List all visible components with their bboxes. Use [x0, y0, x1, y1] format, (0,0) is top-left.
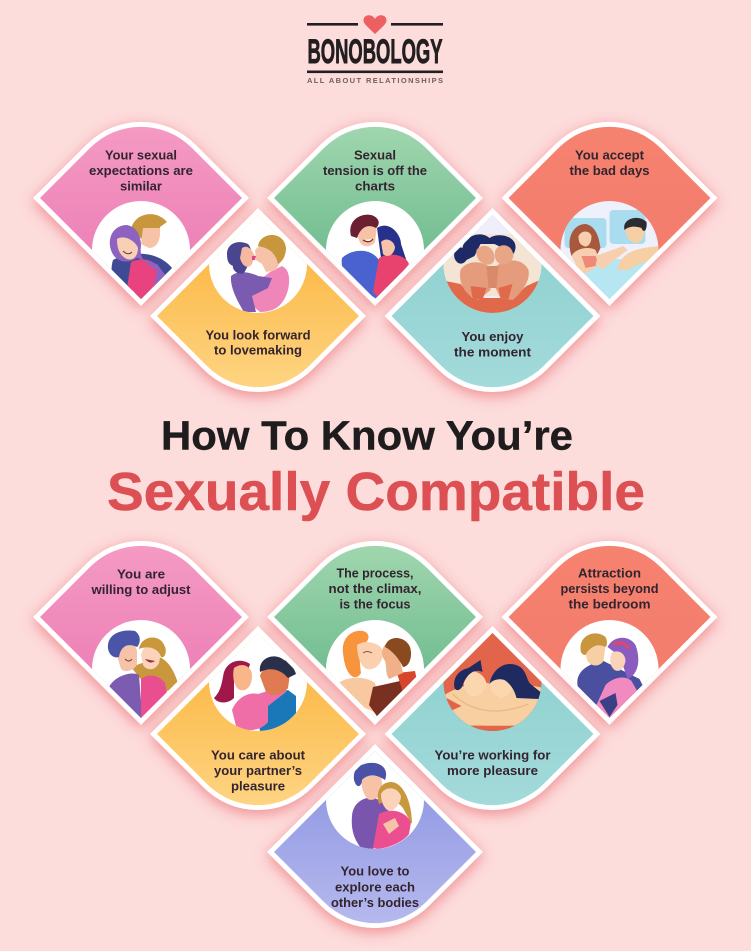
logo rule lower [307, 70, 443, 73]
card: you're working for more pleasure [384, 626, 600, 810]
label: Your sexual [105, 148, 177, 162]
label: similar [120, 178, 162, 194]
logo: Bonobology [307, 15, 443, 85]
icon: heart [364, 15, 386, 34]
illustration: couple in bed [564, 210, 660, 302]
illustration: embracing couple [110, 214, 172, 299]
logo wordmark: BONOBOLOGY [308, 33, 443, 71]
logo tagline: ALL ABOUT RELATIONSHIPS [307, 76, 443, 85]
illustration: couple lying together [442, 660, 544, 732]
label: tension is off the [323, 163, 427, 178]
label: more pleasure [447, 763, 538, 778]
label: You accept [575, 148, 645, 162]
label [90, 566, 191, 597]
illustration: laughing couple [342, 215, 409, 302]
illustration: hugging couple [214, 656, 296, 732]
card: attraction persists beyond the bedroom [502, 541, 718, 725]
label [560, 566, 659, 612]
label [89, 148, 193, 194]
label: You look forward [206, 328, 311, 342]
label [328, 566, 422, 612]
label [454, 329, 532, 360]
label: Attraction [578, 566, 641, 580]
label: You’re working for [434, 748, 550, 762]
label: the bedroom [568, 596, 650, 612]
illustration: kissing couple [227, 235, 289, 312]
card: you accept the bad days [502, 122, 718, 306]
title line 1: How To Know You’re [161, 412, 573, 458]
label: Sexual [354, 148, 396, 162]
card: you care about your partner's pleasure [150, 626, 366, 810]
label: explore each [335, 880, 415, 894]
label: other’s bodies [331, 895, 419, 910]
label: to lovemaking [214, 342, 302, 358]
label: You enjoy [462, 329, 524, 344]
label [323, 148, 427, 194]
title line 2: Sexually Compatible [107, 462, 645, 522]
illustration: kiss on cheek [339, 631, 417, 719]
card: you love to explore each other's bodies [267, 744, 483, 928]
label: willing to adjust [90, 582, 191, 597]
illustration: sweet embrace [352, 763, 412, 849]
card: sexual tension is off the charts [267, 122, 483, 306]
label: The process, [336, 566, 414, 580]
illustration: smiling couple [108, 630, 178, 718]
label: You care about [211, 748, 306, 762]
card: you look forward to lovemaking [150, 208, 366, 392]
label [211, 748, 306, 794]
card: you enjoy the moment [384, 208, 600, 392]
label [206, 328, 311, 358]
logo rule right [391, 23, 443, 26]
card: the process, not the climax, is the focus [267, 541, 483, 725]
label: not the climax, [328, 581, 422, 596]
title [107, 412, 645, 522]
label [331, 864, 419, 910]
label: is the focus [340, 596, 410, 612]
label: the moment [454, 344, 532, 360]
label [570, 148, 650, 178]
card: your sexual expectations are similar [33, 122, 249, 308]
label: persists beyond [560, 581, 659, 596]
illustration: cuddling couple [577, 633, 644, 721]
label: expectations are [89, 163, 193, 178]
label: your partner’s [214, 763, 302, 778]
label: You love to [340, 864, 410, 878]
label: the bad days [570, 163, 650, 178]
illustration: couple holding hands in bed [440, 234, 544, 316]
logo rule left [307, 23, 358, 26]
label: You are [117, 566, 165, 582]
card: you are willing to adjust [33, 541, 249, 727]
label [434, 748, 550, 778]
label: pleasure [231, 778, 285, 794]
label: charts [355, 178, 395, 194]
